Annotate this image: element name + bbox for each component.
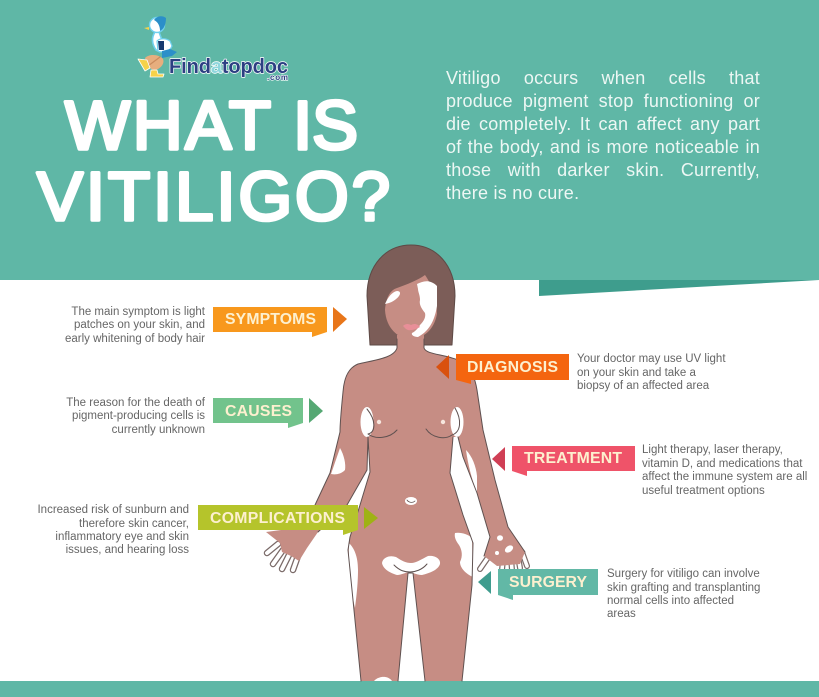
- title: [37, 87, 390, 235]
- text: causes description: The reason for the death of: [66, 397, 206, 409]
- label: causes: [213, 398, 323, 428]
- vitiligo patch: right arm: [466, 450, 477, 493]
- text: treatment description: vitamin D, and medications that: [642, 458, 803, 470]
- vitiligo patch: forehead: [385, 291, 400, 304]
- text: intro paragraph: [446, 68, 760, 203]
- vitiligo patch: groin: [382, 556, 440, 575]
- label: symptoms: SYMPTOMS: [225, 311, 316, 328]
- hair: [367, 245, 455, 345]
- text: intro paragraph: die completely. It can affect any part: [446, 114, 760, 134]
- header band: [0, 0, 819, 280]
- chest: [360, 407, 464, 438]
- vitiligo patch: knee: [374, 677, 392, 681]
- text: diagnosis description: on your skin and take a: [577, 367, 697, 379]
- label: diagnosis: [436, 354, 569, 384]
- text: treatment description: [642, 444, 807, 497]
- text: causes description: [66, 397, 206, 436]
- face: [385, 275, 437, 339]
- text: surgery description: areas: [607, 608, 636, 620]
- text: surgery description: skin grafting and transplanting: [607, 582, 760, 594]
- text: symptoms description: patches on your skin, and: [74, 319, 205, 331]
- label: treatment: TREATMENT: [524, 450, 622, 467]
- text: surgery description: Surgery for vitiligo can involve: [607, 568, 760, 580]
- text: intro paragraph: produce pigment stop functioning or: [446, 91, 760, 111]
- title: IS: [293, 87, 358, 164]
- text: intro paragraph: Vitiligo occurs when cells that: [446, 68, 760, 88]
- text: symptoms description: early whitening of body hair: [65, 333, 205, 345]
- text: intro paragraph: those with darker skin. Currently,: [446, 160, 760, 180]
- text: symptoms description: [65, 306, 206, 345]
- text: symptoms description: The main symptom is light: [71, 306, 206, 318]
- title: VITILIGO?: [37, 158, 390, 235]
- text: diagnosis description: Your doctor may use UV light: [577, 353, 726, 365]
- logo wordmark: Findatopdoc: [169, 56, 288, 78]
- text: intro paragraph: there is no cure.: [446, 183, 579, 203]
- text: diagnosis description: [577, 353, 726, 392]
- label: surgery: SURGERY: [509, 574, 587, 591]
- body outline: [306, 339, 525, 681]
- text: complications description: inflammatory eye and skin: [55, 531, 189, 543]
- text: diagnosis description: biopsy of an affected area: [577, 380, 710, 392]
- vitiligo patch: right hip: [455, 533, 473, 577]
- vitiligo patches: hand: [495, 535, 514, 555]
- vitiligo patch: navel: [405, 497, 417, 505]
- text: causes description: currently unknown: [112, 424, 205, 436]
- footer band: [0, 681, 819, 697]
- icon: duck mascot: [138, 16, 177, 77]
- title: WHAT: [65, 87, 271, 164]
- text: treatment description: useful treatment options: [642, 485, 765, 497]
- header fold shadow: [539, 280, 819, 296]
- logo .com: .com: [267, 73, 288, 82]
- text: surgery description: normal cells into affected: [607, 595, 734, 607]
- label: complications: COMPLICATIONS: [210, 510, 345, 527]
- vitiligo patch: left arm: [331, 448, 345, 474]
- body skin: [266, 335, 525, 681]
- text: treatment description: affect the immune system are all: [642, 471, 807, 483]
- text: treatment description: Light therapy, laser therapy,: [642, 444, 783, 456]
- label: causes: CAUSES: [225, 403, 292, 420]
- text: surgery description: [607, 568, 760, 620]
- label: surgery: [478, 569, 598, 600]
- left hand fingers: [267, 544, 298, 570]
- vitiligo patch: face: [412, 281, 437, 337]
- label: complications: [198, 505, 378, 535]
- lips: [403, 324, 420, 330]
- label: diagnosis: DIAGNOSIS: [467, 359, 558, 376]
- label: symptoms: [213, 307, 347, 337]
- label: treatment: [492, 446, 635, 476]
- logo: Findatopdoc: [138, 16, 288, 82]
- text: complications description: issues, and hearing loss: [66, 544, 189, 556]
- vitiligo patch: left hip: [349, 543, 358, 608]
- right hand fingers: [480, 552, 527, 570]
- body figure: [266, 245, 527, 681]
- text: intro paragraph: of the body, and is more noticeable in: [446, 137, 760, 157]
- text: complications description: [37, 504, 189, 556]
- text: causes description: pigment-producing cells is: [72, 410, 205, 422]
- text: complications description: therefore skin cancer,: [79, 518, 189, 530]
- text: complications description: Increased risk of sunburn and: [37, 504, 189, 516]
